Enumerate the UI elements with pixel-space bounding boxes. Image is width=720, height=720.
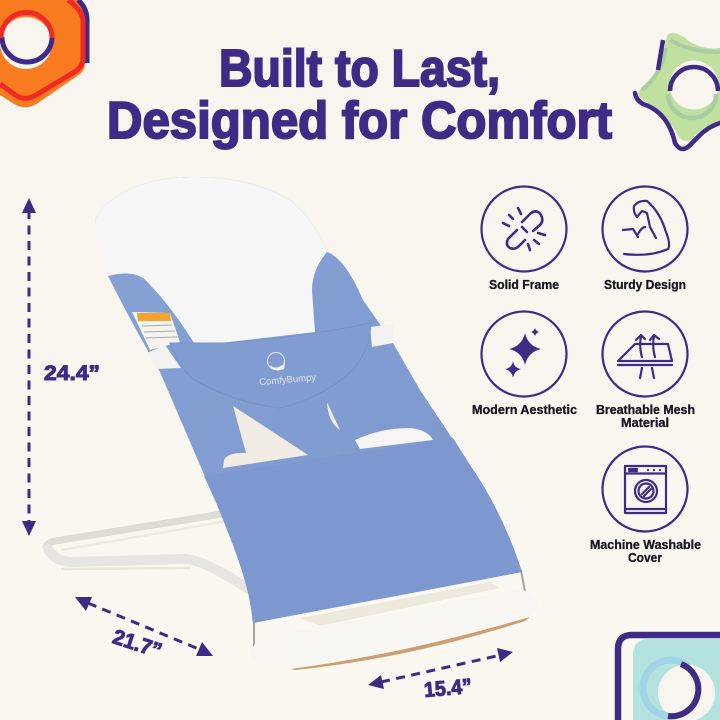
white mesh upper panel (95, 177, 327, 346)
dimension: height 24.4 (22, 198, 100, 536)
feature: breathable mesh: Material (621, 416, 669, 430)
feature: modern aesthetic (472, 312, 577, 417)
decoration: teal square bottom right (618, 635, 720, 720)
warning label (132, 312, 180, 350)
bouncer chair (46, 177, 537, 670)
decoration: orange nut top left (0, 0, 87, 107)
dimension: width 15.4: 15.4” (423, 675, 473, 702)
dimension: depth 21.7 (75, 597, 213, 663)
feature: modern aesthetic: Modern Aesthetic (472, 403, 577, 417)
feature: machine washable (590, 446, 701, 565)
icon: flexed arm (623, 201, 669, 255)
dimension: depth 21.7: 21.7” (110, 626, 165, 663)
decoration: green star top right (635, 33, 720, 149)
mesh cutouts (223, 402, 433, 468)
feature: machine washable: Machine Washable (590, 538, 701, 552)
feature: solid frame: Solid Frame (489, 278, 559, 292)
dimension: height 24.4: 24.4” (44, 362, 100, 385)
feature: breathable mesh (596, 312, 695, 430)
icon: broken link (503, 208, 545, 250)
sling fabric (95, 177, 522, 623)
frame: base (250, 570, 537, 670)
logo (259, 352, 317, 388)
feature: sturdy design (602, 186, 688, 292)
dimension: width 15.4 (368, 648, 513, 702)
feature: breathable mesh: Breathable Mesh (596, 403, 695, 417)
feature: machine washable: Cover (628, 551, 662, 565)
icon: mesh layers with arrows (618, 335, 672, 378)
title: Designed for Comfort (107, 92, 612, 150)
icon: washing machine (625, 466, 666, 513)
frame: tubes (46, 514, 250, 590)
logo: ComfyBumpy (259, 372, 317, 388)
title (107, 40, 612, 150)
feature: solid frame (482, 186, 566, 292)
lower pocket panel (204, 438, 522, 623)
title: Built to Last, (219, 40, 500, 98)
headrest pillow (170, 323, 370, 408)
feature: sturdy design: Sturdy Design (604, 278, 686, 292)
icon: sparkles (505, 328, 541, 378)
straps (147, 324, 393, 369)
